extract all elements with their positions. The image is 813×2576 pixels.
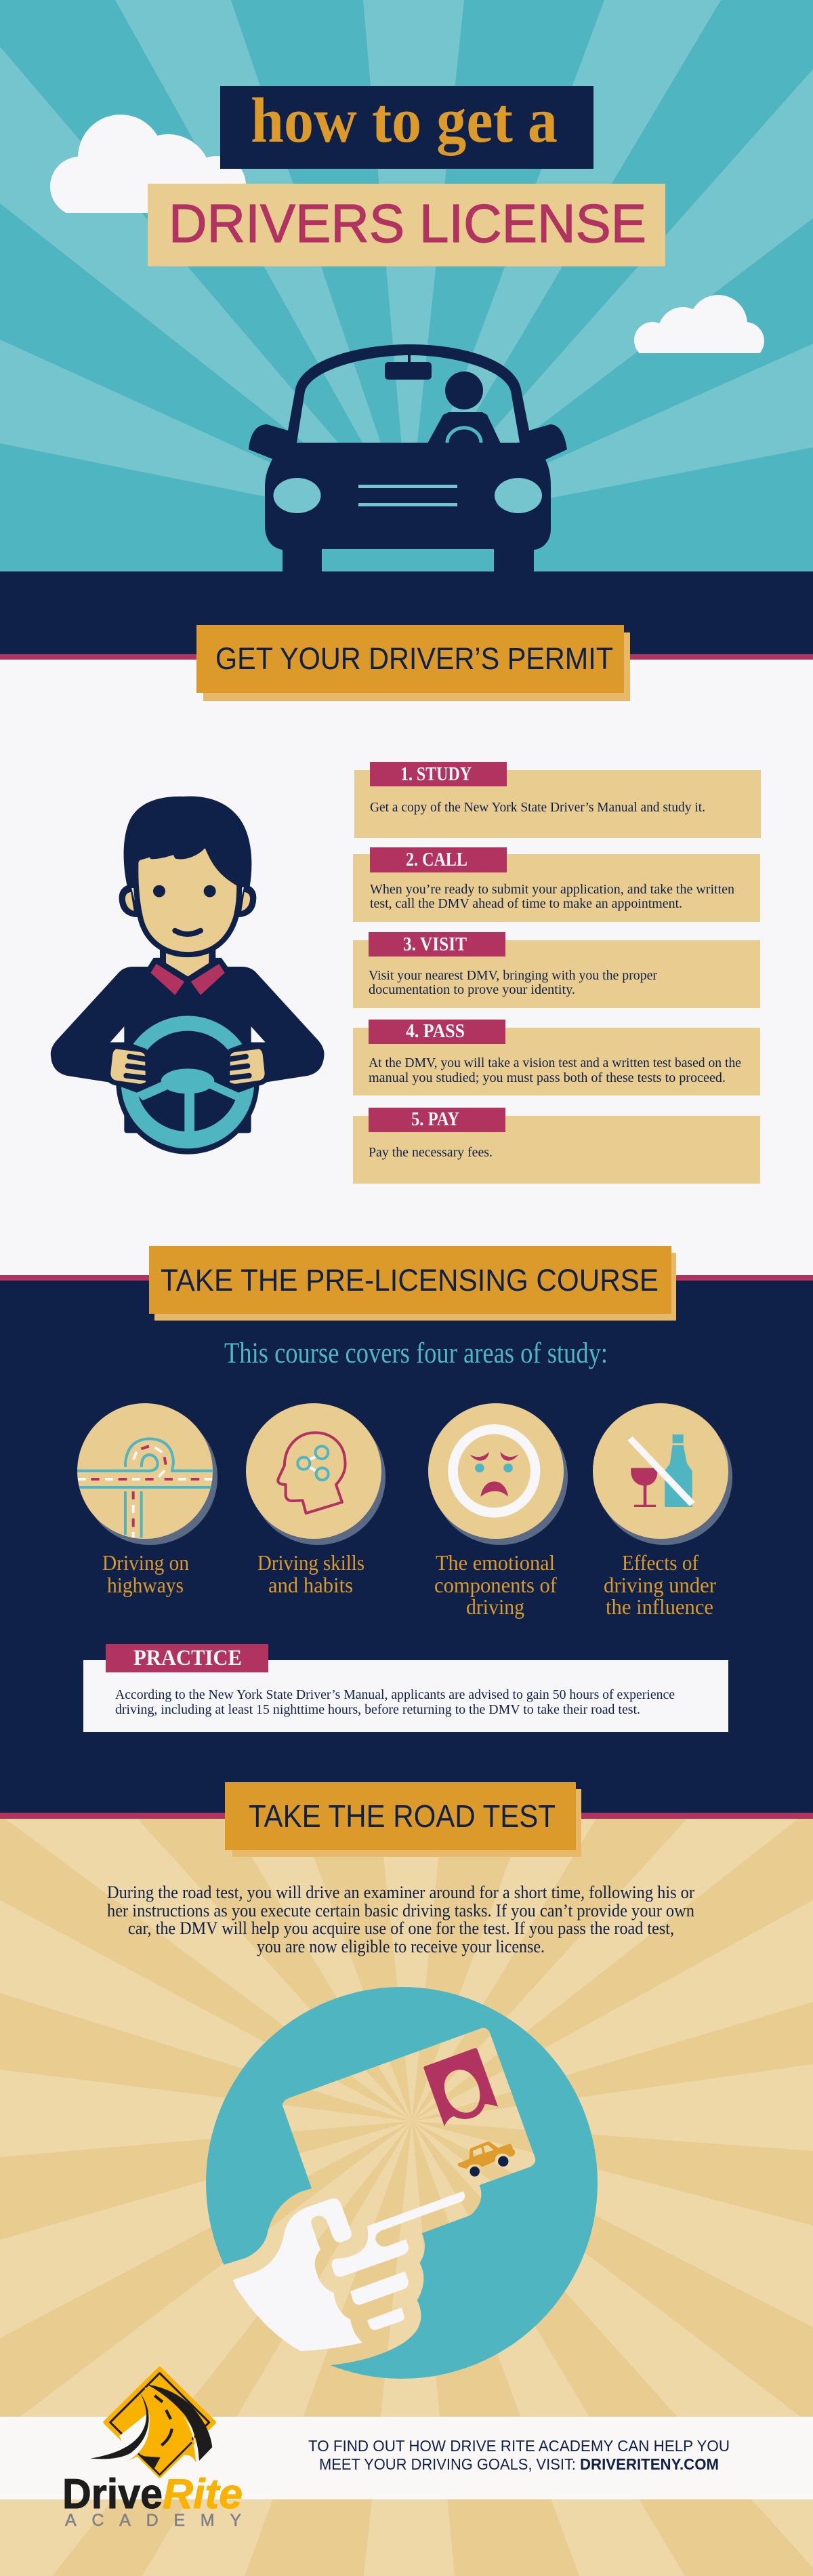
logo: Drive Rite Academy: Drive	[62, 2471, 163, 2518]
title: drivers license	[148, 184, 665, 266]
footer call to action: MEET YOUR DRIVING GOALS, VISIT:	[319, 2455, 576, 2473]
study area 2: skills: and habits	[268, 1573, 353, 1597]
footer call to action: TO FIND OUT HOW DRIVE RITE ACADEMY CAN HELP YOU	[308, 2437, 730, 2455]
license photo badge	[423, 2048, 498, 2127]
study area 3: emotions: components of	[434, 1573, 557, 1597]
teal circle with license cut-out	[206, 1987, 598, 2379]
heading: get your driver's permit	[196, 625, 630, 701]
divider band	[0, 1813, 813, 1819]
step 4: pass	[353, 1020, 760, 1095]
icon: road sign	[90, 2368, 215, 2478]
heading: take the road test: TAKE THE ROAD TEST	[249, 1798, 556, 1834]
footer band	[0, 2417, 813, 2499]
heading: take the pre-licensing course	[149, 1246, 676, 1321]
step 2: call	[353, 847, 760, 922]
study area 2: skills	[246, 1403, 385, 1597]
step 3: visit: documentation to prove your identity.	[369, 982, 575, 997]
study area 3: emotions: The emotional	[436, 1550, 555, 1575]
callout: practice	[83, 1644, 728, 1732]
callout: practice: driving, including at least 15 nighttime hours, before returning to the DMV to take their road test.	[115, 1702, 640, 1717]
icon: right cloud	[634, 295, 764, 353]
text block: road test description: car, the DMV will help you acquire use of one for the test. If you pass the road test,	[128, 1918, 674, 1938]
study area 4: influence: driving under	[604, 1573, 716, 1597]
icon: head with connected nodes	[278, 1432, 346, 1513]
heading: take the pre-licensing course: TAKE THE PRE-LICENSING COURSE	[161, 1263, 659, 1297]
step 1: study	[354, 762, 761, 838]
icon: crossed-out wine and bottle	[627, 1434, 695, 1507]
logo: Drive Rite Academy: Rite	[163, 2471, 243, 2518]
step 2: call: 2. CALL	[406, 849, 467, 870]
study area 1: highways: Driving on	[102, 1550, 189, 1575]
step 5: pay: Pay the necessary fees.	[369, 1145, 493, 1160]
text block: road test description	[107, 1883, 694, 1956]
step 3: visit: 3. VISIT	[403, 933, 467, 955]
step 5: pay	[353, 1108, 760, 1184]
title: drivers license: DRIVERS LICENSE	[169, 193, 646, 254]
callout: practice: According to the New York State Driver’s Manual, applicants are advised to gain 50 hours of experience	[115, 1687, 675, 1702]
study area 1: highways: highways	[107, 1573, 184, 1597]
heading: get your driver's permit: GET YOUR DRIVER’S PERMIT	[215, 641, 613, 676]
study area 3: emotions	[428, 1403, 568, 1619]
background: sky	[0, 0, 813, 576]
step 2: call: When you’re ready to submit your application, and take the written	[370, 882, 734, 897]
footer call to action: DRIVERITENY.COM	[580, 2455, 719, 2473]
callout: practice: PRACTICE	[133, 1646, 242, 1670]
text block: road test description: you are now eligible to receive your license.	[257, 1937, 545, 1956]
icon: highway interchange	[77, 1438, 213, 1537]
illustration: hand holding license	[233, 2048, 515, 2351]
icon: small car on license	[458, 2141, 515, 2177]
study area 4: influence: Effects of	[622, 1550, 699, 1575]
study area 4: influence: the influence	[606, 1594, 713, 1619]
heading: take the road test	[225, 1782, 581, 1857]
divider band	[0, 654, 813, 660]
step 4: pass: 4. PASS	[406, 1020, 465, 1042]
right hand	[228, 1049, 265, 1084]
icon: crying face	[448, 1424, 540, 1518]
illustration: driver at steering wheel	[51, 797, 324, 1154]
background: road test sunburst	[0, 1819, 813, 2576]
subheading: This course covers four areas of study:	[224, 1337, 608, 1369]
step 5: pay: 5. PAY	[411, 1108, 459, 1130]
step 4: pass: At the DMV, you will take a vision test and a written test based on the	[369, 1055, 741, 1070]
panel: permit section background	[0, 660, 813, 1275]
step 2: call: test, call the DMV ahead of time to make an appointment.	[370, 896, 682, 911]
step 4: pass: manual you studied; you must pass both of these tests to proceed.	[369, 1070, 726, 1085]
left hand	[110, 1049, 147, 1084]
divider band	[0, 1275, 813, 1281]
icon: car with driver	[249, 344, 567, 571]
study area 3: emotions: driving	[466, 1594, 524, 1619]
study area 1: highways	[77, 1403, 217, 1597]
panel: pre-licensing section background	[0, 1281, 813, 1813]
step 1: study: 1. STUDY	[400, 763, 472, 785]
study area 2: skills: Driving skills	[257, 1550, 364, 1575]
step 3: visit	[353, 932, 760, 1008]
text block: road test description: her instructions as you execute certain basic driving tasks. If you can’t provide your own	[107, 1901, 694, 1920]
footer call to action	[308, 2437, 730, 2473]
step 3: visit: Visit your nearest DMV, bringing with you the proper	[369, 968, 657, 983]
step 1: study: Get a copy of the New York State Driver’s Manual and study it.	[370, 800, 705, 815]
study area 4: influence	[593, 1403, 732, 1619]
icon: left cloud	[50, 115, 246, 221]
logo: Drive Rite Academy	[62, 2368, 243, 2530]
road band	[0, 571, 813, 654]
title: how to get a: how to get a	[251, 85, 558, 156]
logo: Drive Rite Academy: ACADEMY	[65, 2511, 241, 2530]
text block: road test description: During the road test, you will drive an examiner around for a short time, following his or	[107, 1883, 694, 1902]
